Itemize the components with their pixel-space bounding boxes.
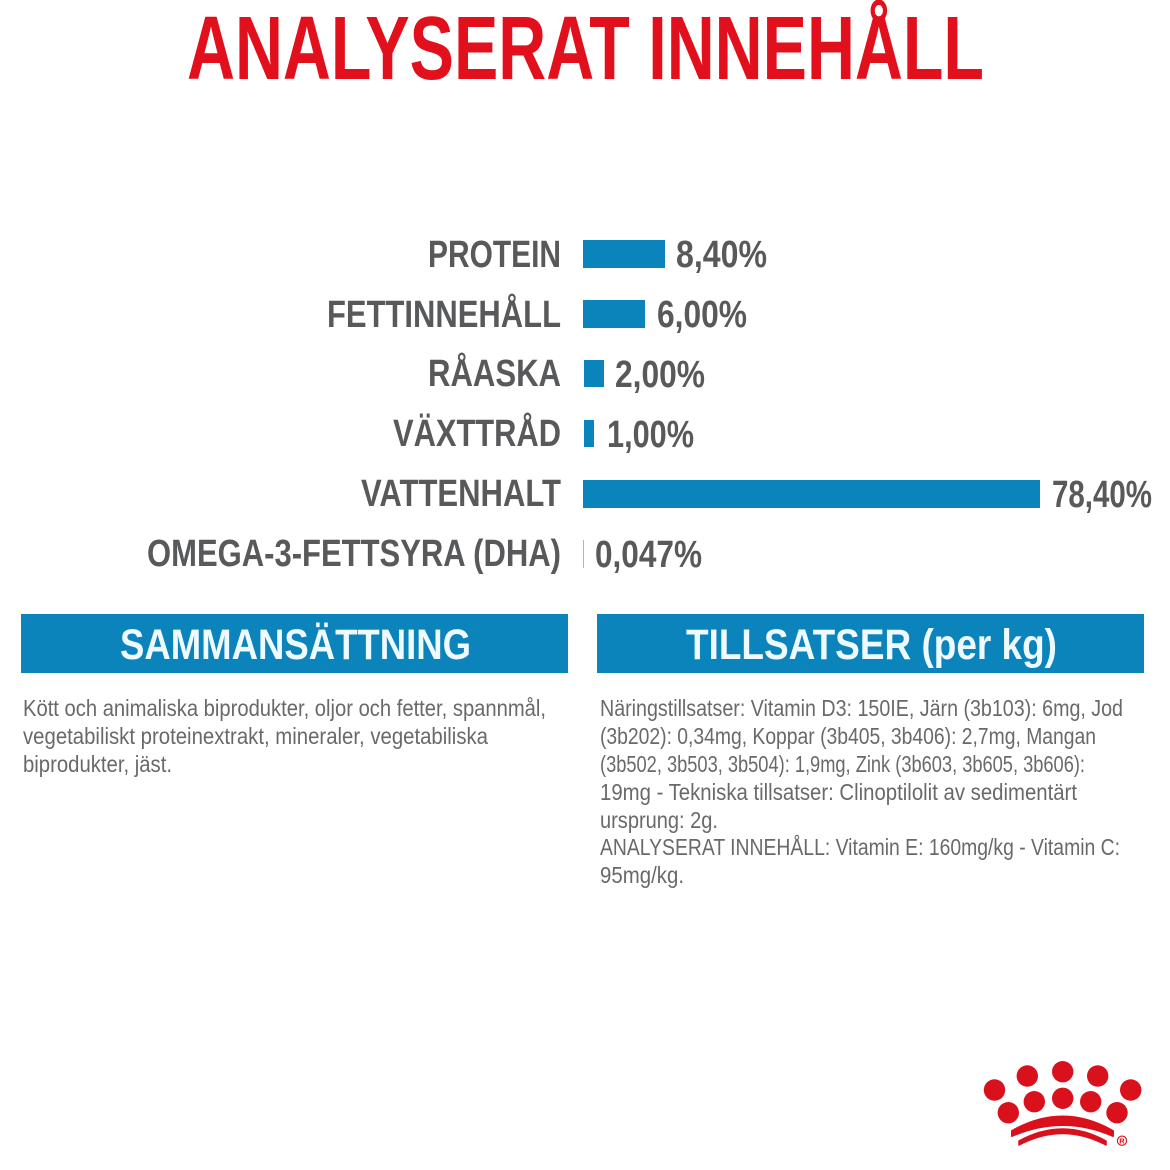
row: moisture: VATTENHALT xyxy=(361,473,561,515)
row: protein xyxy=(428,234,767,276)
row: omega-3: OMEGA-3-FETTSYRA (DHA) xyxy=(147,533,561,575)
panel: additives xyxy=(597,614,1144,888)
row: protein: 8,40% xyxy=(676,234,767,276)
text block: composition: vegetabiliskt proteinextrakt, mineraler, vegetabiliska xyxy=(23,723,488,749)
heading: additives: TILLSATSER (per kg) xyxy=(686,621,1057,669)
panel: composition xyxy=(21,614,568,777)
icon: crown logo: R xyxy=(1119,1136,1125,1146)
text block: additives: 95mg/kg. xyxy=(600,862,684,888)
nutrient bar chart xyxy=(147,234,1152,576)
row: crude ash: 2,00% xyxy=(615,354,705,396)
text block: additives xyxy=(600,695,1123,888)
row: protein: PROTEIN xyxy=(428,234,561,276)
text block: composition xyxy=(23,695,546,777)
row: fat content: 6,00% xyxy=(657,294,747,336)
text block: additives: ursprung: 2g. xyxy=(600,807,718,833)
heading: additives xyxy=(597,614,1144,673)
text block: composition: Kött och animaliska biprodukter, oljor och fetter, spannmål, xyxy=(23,695,546,721)
heading: composition: SAMMANSÄTTNING xyxy=(120,621,471,669)
row: moisture xyxy=(361,473,1152,516)
row: fat content xyxy=(327,292,747,336)
row: crude ash: RÅASKA xyxy=(428,351,561,395)
row: crude fibre xyxy=(393,411,694,456)
row: crude fibre: VÄXTTRÅD xyxy=(393,411,561,455)
text block: additives: 19mg - Tekniska tillsatser: Clinoptilolit av sedimentärt xyxy=(600,779,1078,805)
text block: composition: biprodukter, jäst. xyxy=(23,751,172,777)
icon: crown logo xyxy=(984,1061,1141,1146)
row: crude fibre: 1,00% xyxy=(607,414,694,456)
row: omega-3: 0,047% xyxy=(595,534,702,576)
row: fat content: FETTINNEHÅLL xyxy=(327,292,561,336)
row: crude ash xyxy=(428,351,705,396)
heading: composition xyxy=(21,614,568,673)
